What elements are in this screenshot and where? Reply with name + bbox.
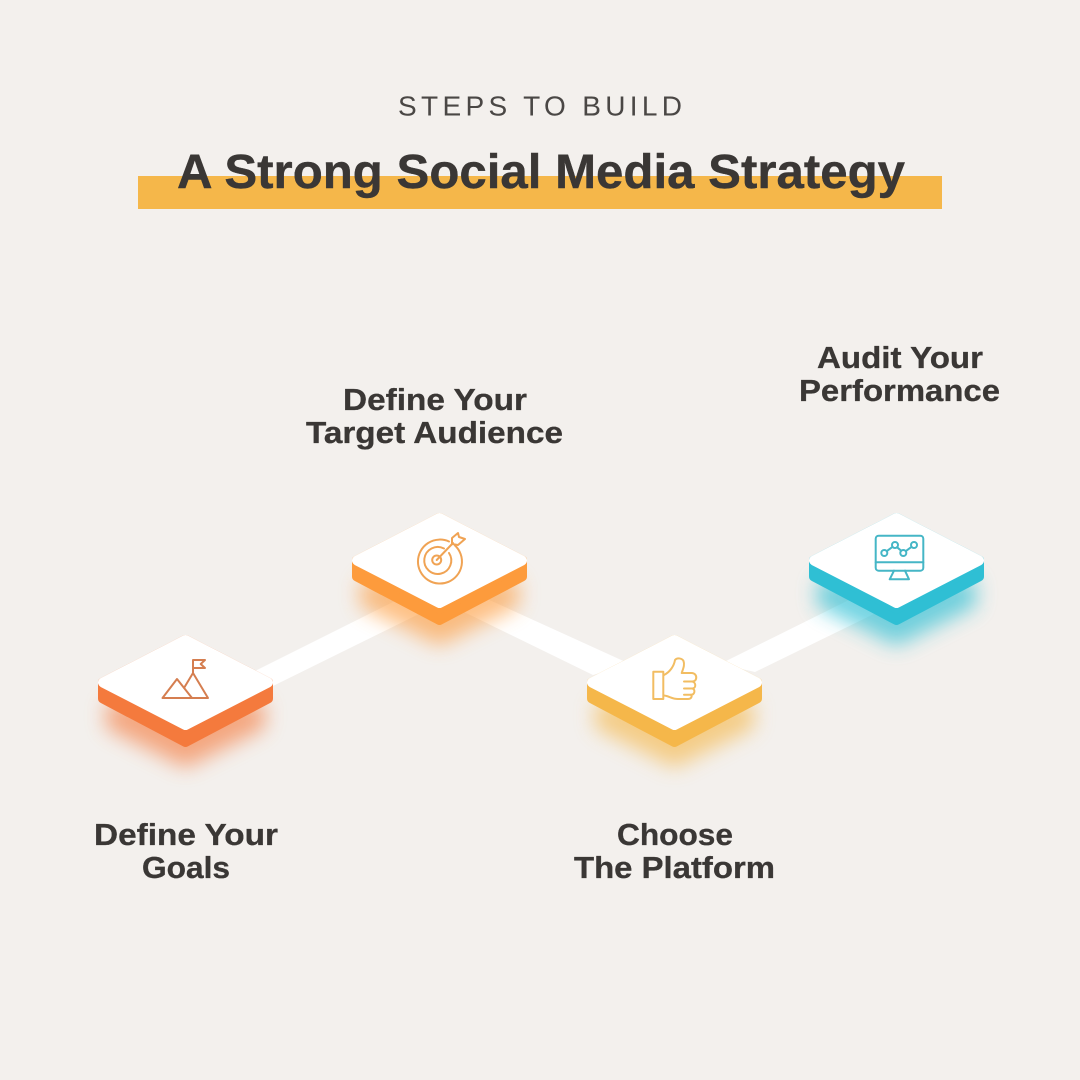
connector: platform to performance bbox=[720, 597, 880, 672]
label: define your goals: Goals bbox=[142, 850, 230, 885]
tile: teal bbox=[814, 518, 979, 620]
icon: thumbs up bbox=[653, 658, 696, 699]
label: choose the platform: The Platform bbox=[574, 850, 775, 885]
label: define your goals: Define Your bbox=[94, 817, 278, 852]
label: define your target audience: Define Your bbox=[343, 382, 527, 417]
label: audit your performance: Performance bbox=[799, 373, 1000, 408]
label: audit your performance bbox=[799, 340, 1000, 408]
icon: mountain with flag bbox=[162, 660, 208, 698]
glow: yellow bbox=[595, 702, 754, 768]
connector: audience to platform bbox=[460, 598, 630, 675]
subtitle: STEPS TO BUILD bbox=[398, 90, 682, 122]
label: define your target audience bbox=[306, 382, 563, 450]
tile: amber bbox=[357, 518, 522, 620]
glow: orange bbox=[106, 702, 265, 768]
step 2: define your target audience bbox=[306, 382, 563, 646]
step 4: audit your performance bbox=[799, 340, 1000, 646]
step 1: define your goals bbox=[94, 640, 278, 885]
tile: orange bbox=[103, 640, 268, 742]
glow: teal bbox=[817, 580, 976, 646]
label: audit your performance: Audit Your bbox=[817, 340, 983, 375]
icon: target with arrow bbox=[418, 533, 465, 584]
label: choose the platform: Choose bbox=[617, 817, 733, 852]
title highlight bar bbox=[138, 176, 942, 209]
header bbox=[138, 90, 942, 209]
title: A Strong Social Media Strategy bbox=[177, 146, 905, 199]
connector: goals to audience bbox=[250, 601, 425, 686]
label: define your target audience: Target Audience bbox=[306, 415, 563, 450]
label: define your goals bbox=[94, 817, 278, 885]
label: choose the platform bbox=[574, 817, 775, 885]
glow: amber bbox=[360, 580, 519, 646]
tile: yellow bbox=[592, 640, 757, 742]
step 3: choose the platform bbox=[574, 640, 775, 885]
icon: monitor with line chart bbox=[876, 536, 923, 579]
